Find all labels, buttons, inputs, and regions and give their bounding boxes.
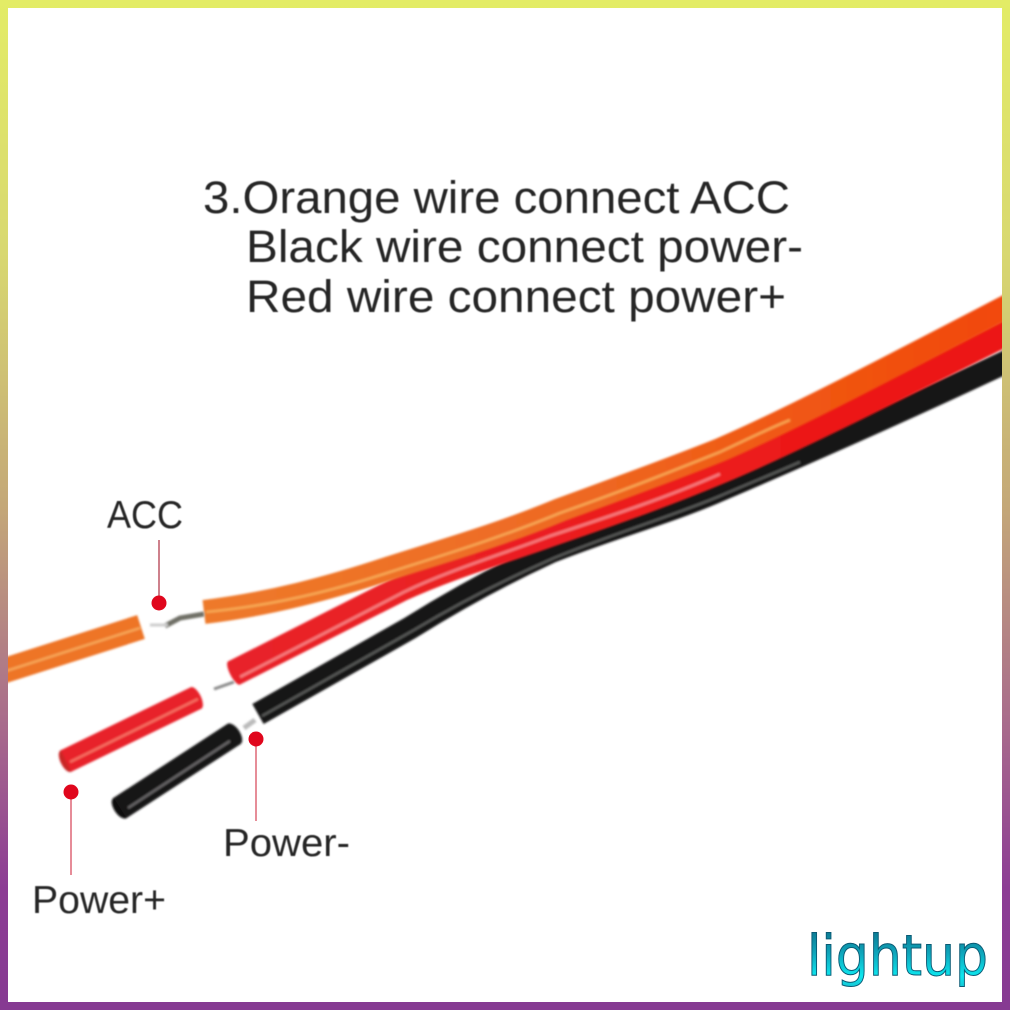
- brand logo: lightup: lightup: [807, 924, 988, 989]
- orange wire main: [204, 305, 1010, 612]
- callout: Power-: [223, 732, 350, 865]
- orange cut wire stub: [0, 627, 141, 673]
- heading text: Red wire connect power+: [246, 271, 786, 322]
- exposed copper strands: [150, 614, 255, 728]
- callout: ACC: [107, 494, 183, 610]
- red wire main: [225, 331, 1010, 686]
- red cut wire stub: [56, 685, 206, 774]
- callout: ACC: ACC: [107, 494, 183, 537]
- wiring illustration: [8, 179, 1002, 987]
- black cut wire stub: [108, 721, 246, 821]
- heading text: [203, 172, 803, 322]
- callout: Power+: [32, 784, 166, 922]
- wires group: [0, 305, 1010, 821]
- callout: Power-: Power-: [223, 822, 350, 865]
- heading text: Black wire connect power-: [246, 221, 803, 272]
- heading text: 3.Orange wire connect ACC: [203, 172, 790, 223]
- callout: Power+: Power+: [32, 879, 166, 922]
- black wire main: [258, 360, 1010, 716]
